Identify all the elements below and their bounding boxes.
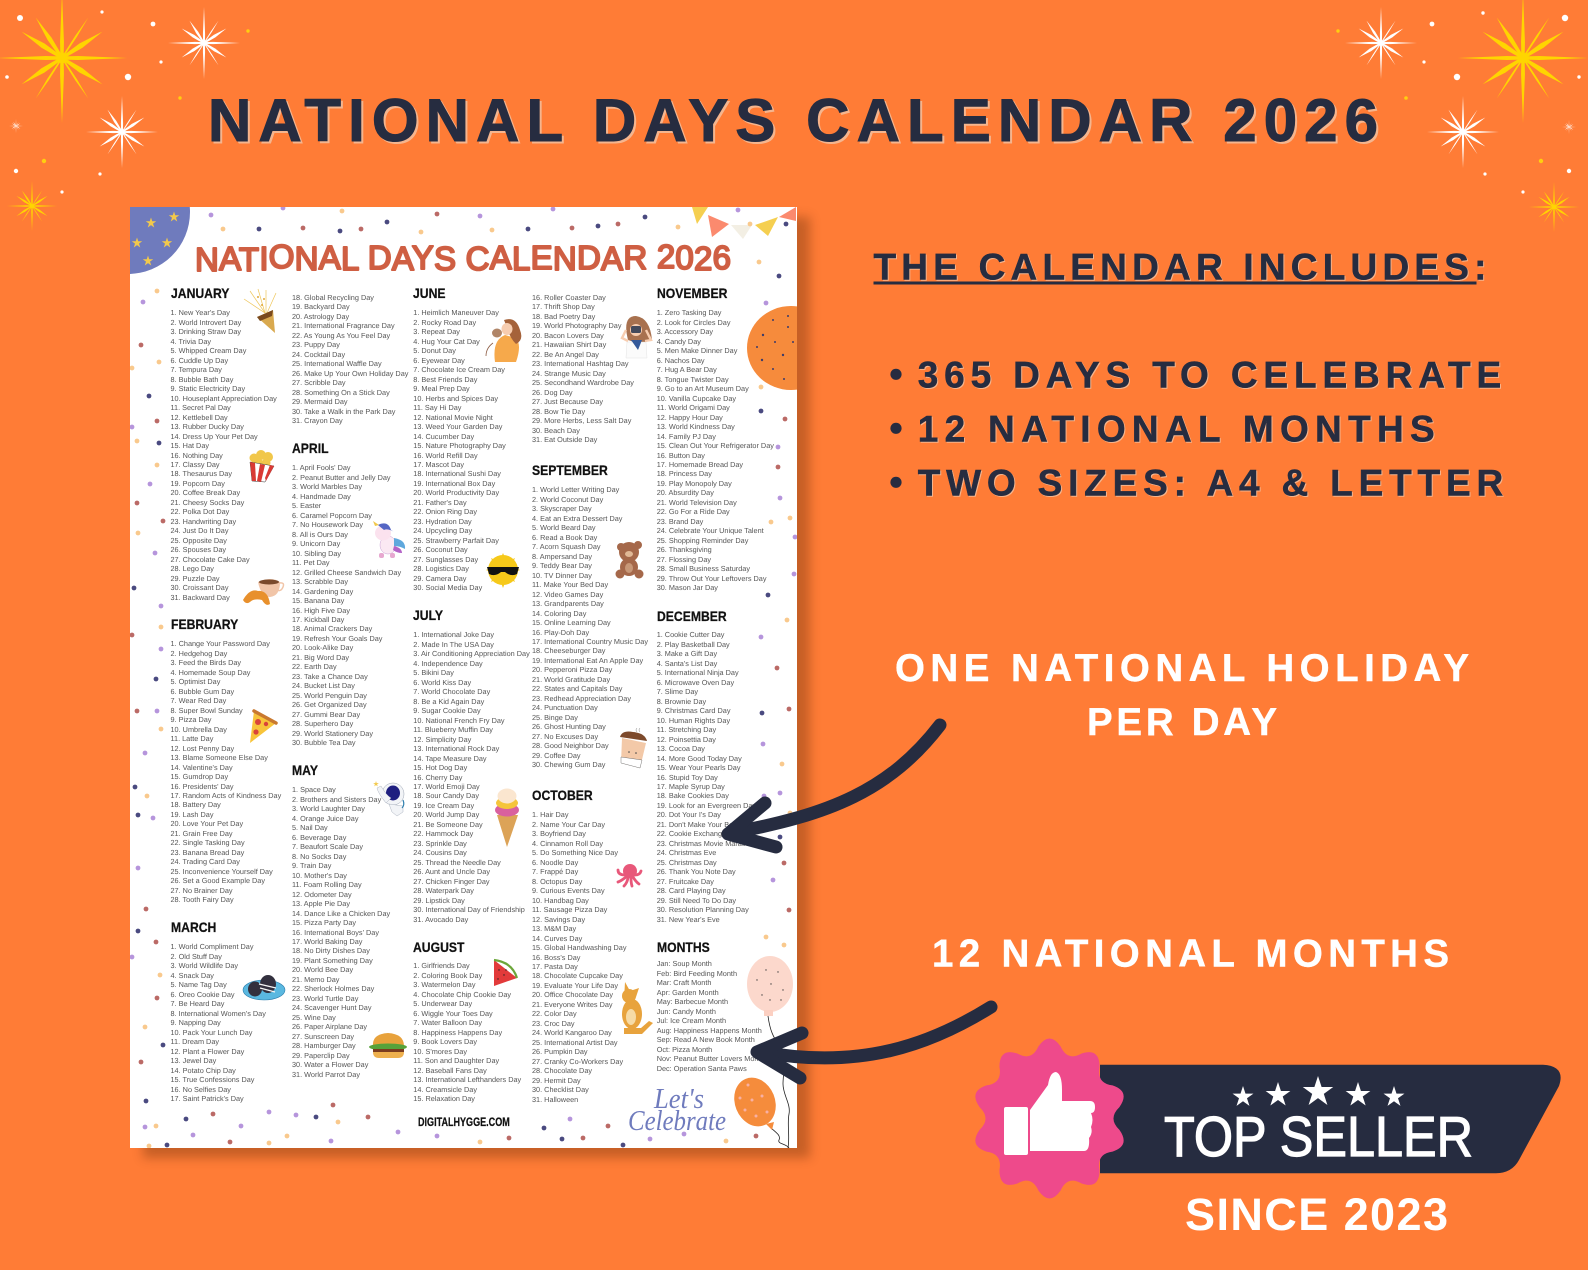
list: August part one: AUGUST — [413, 939, 465, 955]
icon: five stars — [1233, 1076, 1404, 1106]
list: August part two: 16. Roller Coaster Day 17. Thrift Shop Day 18. Bad Poetry Day 19. World Photography Day 20. Bacon Lovers Day 21. Hawaiian Shirt Day 22. Be An Angel Day 23. International Hashtag Day 24. Strange Music Day 25. Secondhand Wardrobe Day 26. Dog Day 27. Just Because Day 28. Bow Tie Day 29. More Herbs, Less Salt Day 30. Beach Day 31. Eat Outside Day — [532, 293, 634, 444]
list: February: FEBRUARY — [170, 616, 238, 632]
decoration: orange blob — [747, 306, 835, 390]
list: June: JUNE — [413, 285, 446, 301]
icon: kangaroo — [622, 982, 653, 1034]
list: May: 1. Space Day 2. Brothers and Sisters Day 3. World Laughter Day 4. Orange Juice Day 5. Nail Day 6. Beverage Day 7. Beaufort Scale Day 8. No Socks Day 9. Train Day 10. Mother's Day 11. Foam Rolling Day 12. Odometer Day 13. Apple Pie Day 14. Dance Like a Chicken Day 15. Pizza Party Day 16. International Boys' Day 17. World Baking Day 18. No Dirty Dishes Day 19. Plant Something Day 20. World Bee Day 21. Memo Day 22. Sherlock Holmes Day 23. World Turtle Day 24. Scavenger Hunt Day 25. Wine Day 26. Paper Airplane Day 27. Sunscreen Day 28. Hamburger Day 29. Paperclip Day 30. Water a Flower Day 31. World Parrot Day — [292, 785, 390, 1079]
lettering: let's celebrate: Let's — [653, 1083, 704, 1115]
icon: octopus — [618, 864, 641, 886]
icon: popcorn — [250, 450, 274, 482]
list: October: 1. Hair Day 2. Name Your Car Day 3. Boyfriend Day 4. Cinnamon Roll Day 5. Do Something Nice Day 6. Noodle Day 7. Frappé Day 8. Octopus Day 9. Curious Events Day 10. Handbag Day 11. Sausage Pizza Day 12. Savings Day 13. M&M Day 14. Curves Day 15. Global Handwashing Day 16. Boss's Day 17. Pasta Day 18. Chocolate Cupcake Day 19. Evaluate Your Life Day 20. Office Chocolate Day 21. Everyone Writes Day 22. Color Day 23. Croc Day 24. World Kangaroo Day 25. International Artist Day 26. Pumpkin Day 27. Cranky Co-Workers Day 28. Chocolate Day 29. Hermit Day 30. Checklist Day 31. Halloween — [532, 810, 627, 1104]
icon: thumbs up — [1004, 1072, 1095, 1155]
callout: one national holiday per day: ONE NATIONAL HOLIDAY — [895, 647, 1469, 690]
list: June: 1. Heimlich Maneuver Day 2. Rocky Road Day 3. Repeat Day 4. Hug Your Cat Day 5. Donut Day 6. Eyewear Day 7. Chocolate Ice Cream Day 8. Best Friends Day 9. Meal Prep Day 10. Herbs and Spices Day 11. Say Hi Day 12. National Movie Night 13. Weed Your Garden Day 14. Cucumber Day 15. Nature Photography Day 16. World Refill Day 17. Mascot Day 18. International Sushi Day 19. International Box Day 20. World Productivity Day 21. Father's Day 22. Onion Ring Day 23. Hydration Day 24. Upcycling Day 25. Strawberry Parfait Day 26. Coconut Day 27. Sunglasses Day 28. Logistics Day 29. Camera Day 30. Social Media Day — [413, 308, 506, 592]
list: October: OCTOBER — [532, 787, 593, 803]
callout: 12 national months: 12 NATIONAL MONTHS — [932, 933, 1449, 976]
icon: pink balloon — [747, 956, 793, 1148]
list: February: 1. Change Your Password Day 2. Hedgehog Day 3. Feed the Birds Day 4. Homemade Soup Day 5. Optimist Day 6. Bubble Gum Day 7. Wear Red Day 8. Super Bowl Sunday 9. Pizza Day 10. Umbrella Day 11. Latte Day 12. Lost Penny Day 13. Blame Someone Else Day 14. Valentine's Day 15. Gumdrop Day 16. Presidents' Day 17. Random Acts of Kindness Day 18. Battery Day 19. Lash Day 20. Love Your Pet Day 21. Grain Free Day 22. Single Tasking Day 23. Banana Bread Day 24. Trading Card Day 25. Inconvenience Yourself Day 26. Set a Good Example Day 27. No Brainer Day 28. Tooth Fairy Day — [170, 639, 281, 904]
icon: sun with sunglasses — [486, 553, 520, 588]
icon: coffee cup — [620, 728, 647, 768]
list: March part one: 1. World Compliment Day 2. Old Stuff Day 3. World Wildlife Day 4. Snack Day 5. Name Tag Day 6. Oreo Cookie Day 7. Be Heard Day 8. International Women's Day 9. Napping Day 10. Pack Your Lunch Day 11. Dream Day 12. Plant a Flower Day 13. Jewel Day 14. Potato Chip Day 15. True Confessions Day 16. No Selfies Day 17. Saint Patrick's Day — [170, 942, 266, 1103]
callout: one national holiday per day — [895, 647, 1469, 744]
icon: watermelon — [494, 960, 517, 986]
icon: pizza slice — [250, 711, 276, 743]
arrow: holiday callout to December list — [728, 725, 940, 847]
icon: unicorn — [373, 521, 405, 558]
arrow: months callout to Months list — [757, 1007, 991, 1078]
list: September: SEPTEMBER — [532, 462, 608, 478]
bullet list: features: 365 DAYS TO CELEBRATE — [918, 354, 1501, 395]
list: November: 1. Zero Tasking Day 2. Look for Circles Day 3. Accessory Day 4. Candy Day 5. Men Make Dinner Day 6. Nachos Day 7. Hug A Bear Day 8. Tongue Twister Day 9. Go to an Art Museum Day 10. Vanilla Cupcake Day 11. World Origami Day 12. Happy Hour Day 13. World Kindness Day 14. Family PJ Day 15. Clean Out Your Refrigerator Day 16. Button Day 17. Homemade Bread Day 18. Princess Day 19. Play Monopoly Day 20. Absurdity Day 21. World Television Day 22. Go For a Ride Day 23. Brand Day 24. Celebrate Your Unique Talent 25. Shopping Reminder Day 26. Thanksgiving 27. Flossing Day 28. Small Business Saturday 29. Throw Out Your Leftovers Day 30. Mason Jar Day — [657, 308, 774, 592]
list: November: NOVEMBER — [657, 285, 727, 301]
decoration: confetti dots — [130, 206, 797, 1148]
label: top seller: TOP SELLER — [1164, 1105, 1473, 1169]
poster title: NATIONAL DAYS CALENDAR 2026 — [195, 238, 731, 278]
decoration: right fireworks — [1336, 0, 1588, 232]
poster artwork — [130, 207, 797, 1148]
panel: calendar poster — [130, 207, 797, 1148]
lettering: let's celebrate — [628, 1083, 726, 1137]
list: Months: MONTHS — [657, 939, 709, 955]
list: Months: Jan: Soup Month Feb: Bird Feeding Month Mar: Craft Month Apr: Garden Month May: Barbecue Month Jun: Candy Month Jul: Ice Cream Month Aug: Happiness Happens Month Sep: Read A New Book Month Oct: Pizza Month Nov: Peanut Butter Lovers Month Dec: Operation Santa Paws — [657, 959, 765, 1073]
decoration: purple corner with stars — [66, 150, 190, 274]
icon: astronaut — [373, 781, 404, 816]
list: January: JANUARY — [170, 285, 229, 301]
list: August part one: 1. Girlfriends Day 2. Coloring Book Day 3. Watermelon Day 4. Chocolate Chip Cookie Day 5. Underwear Day 6. Wiggle Your Toes Day 7. Water Balloon Day 8. Happiness Happens Day 9. Book Lovers Day 10. S'mores Day 11. Son and Daughter Day 12. Baseball Fans Day 13. International Lefthanders Day 14. Creamsicle Day 15. Relaxation Day — [413, 961, 521, 1103]
banner — [1100, 1065, 1561, 1173]
icon: pink seal — [975, 1039, 1124, 1198]
list: July: JULY — [413, 607, 443, 623]
icon: girl with camera — [622, 316, 652, 358]
icon: ice cream cone — [495, 788, 519, 847]
label: since 2023: SINCE 2023 — [1185, 1189, 1448, 1240]
list: March part two: 18. Global Recycling Day 19. Backyard Day 20. Astrology Day 21. International Fragrance Day 22. As Young As You Feel Day 23. Puppy Day 24. Cocktail Day 25. International Waffle Day 26. Make Up Your Own Holiday Day 27. Scribble Day 28. Something On a Stick Day 29. Mermaid Day 30. Take a Walk in the Park Day 31. Crayon Day — [292, 293, 408, 425]
icon: orange balloon — [727, 1071, 789, 1148]
icon: coffee and croissant — [243, 579, 284, 605]
list: December: DECEMBER — [657, 608, 726, 624]
list: July: 1. International Joke Day 2. Made In The USA Day 3. Air Conditioning Appreciation Day 4. Independence Day 5. Bikini Day 6. World Kiss Day 7. World Chocolate Day 8. Be a Kid Again Day 9. Sugar Cookie Day 10. National French Fry Day 11. Blueberry Muffin Day 12. Simplicity Day 13. International Rock Day 14. Tape Measure Day 15. Hot Dog Day 16. Cherry Day 17. World Emoji Day 18. Sour Candy Day 19. Ice Cream Day 20. World Jump Day 21. Be Someone Day 22. Hammock Day 23. Sprinkle Day 24. Cousins Day 25. Thread the Needle Day 26. Aunt and Uncle Day 27. Chicken Finger Day 28. Waterpark Day 29. Lipstick Day 30. International Day of Friendship 31. Avocado Day — [413, 630, 530, 924]
label: digitalhygge.com: DIGITALHYGGE.COM — [418, 1116, 510, 1129]
decoration: left fireworks — [0, 0, 250, 231]
list: September: 1. World Letter Writing Day 2. World Coconut Day 3. Skyscraper Day 4. Eat an Extra Dessert Day 5. World Beard Day 6. Read a Book Day 7. Acorn Squash Day 8. Ampersand Day 9. Teddy Bear Day 10. TV Dinner Day 11. Make Your Bed Day 12. Video Games Day 13. Grandparents Day 14. Coloring Day 15. Online Learning Day 16. Play-Doh Day 17. International Country Music Day 18. Cheeseburger Day 19. International Eat An Apple Day 20. Pepperoni Pizza Day 21. World Gratitude Day 22. States and Capitals Day 23. Redhead Appreciation Day 24. Punctuation Day 25. Binge Day 26. Ghost Hunting Day 27. No Excuses Day 28. Good Neighbor Day 29. Coffee Day 30. Chewing Gum Day — [532, 485, 648, 769]
icon: party popper — [244, 289, 276, 333]
lettering: let's celebrate: Celebrate — [628, 1105, 726, 1137]
list: April: APRIL — [292, 440, 329, 456]
list: April: 1. April Fools' Day 2. Peanut Butter and Jelly Day 3. World Marbles Day 4. Handmade Day 5. Easter 6. Caramel Popcorn Day 7. No Housework Day 8. All is Ours Day 9. Unicorn Day 10. Sibling Day 11. Pet Day 12. Grilled Cheese Sandwich Day 13. Scrabble Day 14. Gardening Day 15. Banana Day 16. High Five Day 17. Kickball Day 18. Animal Crackers Day 19. Refresh Your Goals Day 20. Look-Alike Day 21. Big Word Day 22. Earth Day 23. Take a Chance Day 24. Bucket List Day 25. World Penguin Day 26. Get Organized Day 27. Gummi Bear Day 28. Superhero Day 29. World Stationery Day 30. Bubble Tea Day — [292, 463, 401, 747]
icon: oreo plate — [243, 975, 285, 1000]
heading: the calendar includes: THE CALENDAR INCLUDES: — [874, 246, 1486, 288]
list: May: MAY — [292, 762, 318, 778]
list: March part one: MARCH — [170, 919, 216, 935]
bullet list: features — [890, 354, 1503, 504]
icon: girl with cat — [486, 319, 521, 362]
callout: one national holiday per day: PER DAY — [1087, 701, 1277, 744]
icon: hamburger — [369, 1033, 407, 1058]
list: January: 1. New Year's Day 2. World Introvert Day 3. Drinking Straw Day 4. Trivia Day 5. Whipped Cream Day 6. Cuddle Up Day 7. Tempura Day 8. Bubble Bath Day 9. Static Electricity Day 10. Houseplant Appreciation Day 11. Secret Pal Day 12. Kettlebell Day 13. Rubber Ducky Day 14. Dress Up Your Pet Day 15. Hat Day 16. Nothing Day 17. Classy Day 18. Thesaurus Day 19. Popcorn Day 20. Coffee Break Day 21. Cheesy Socks Day 22. Polka Dot Day 23. Handwriting Day 24. Just Do It Day 25. Opposite Day 26. Spouses Day 27. Chocolate Cake Day 28. Lego Day 29. Puzzle Day 30. Croissant Day 31. Backward Day — [170, 308, 277, 602]
bullet list: features: TWO SIZES: A4 & LETTER — [918, 463, 1503, 504]
decoration: bunting — [692, 207, 796, 239]
bullet list: features: 12 NATIONAL MONTHS — [918, 409, 1435, 450]
icon: teddy bear — [616, 541, 644, 578]
badge: top seller — [975, 1039, 1561, 1198]
title: NATIONAL DAYS CALENDAR 2026 — [208, 87, 1378, 154]
list: December: 1. Cookie Cutter Day 2. Play Basketball Day 3. Make a Gift Day 4. Santa's List Day 5. International Ninja Day 6. Microwave Oven Day 7. Slime Day 8. Brownie Day 9. Christmas Card Day 10. Human Rights Day 11. Stretching Day 12. Poinsettia Day 13. Cocoa Day 14. More Good Today Day 15. Wear Your Pearls Day 16. Stupid Toy Day 17. Maple Syrup Day 18. Bake Cookies Day 19. Look for an Evergreen Day 20. Dot Your I's Day 21. Don't Make Your Bed Day 22. Cookie Exchange Day 23. Christmas Movie Marathon 24. Christmas Eve 25. Christmas Day 26. Thank You Note Day 27. Fruitcake Day 28. Card Playing Day 29. Still Need To Do Day 30. Resolution Planning Day 31. New Year's Eve — [657, 630, 756, 924]
